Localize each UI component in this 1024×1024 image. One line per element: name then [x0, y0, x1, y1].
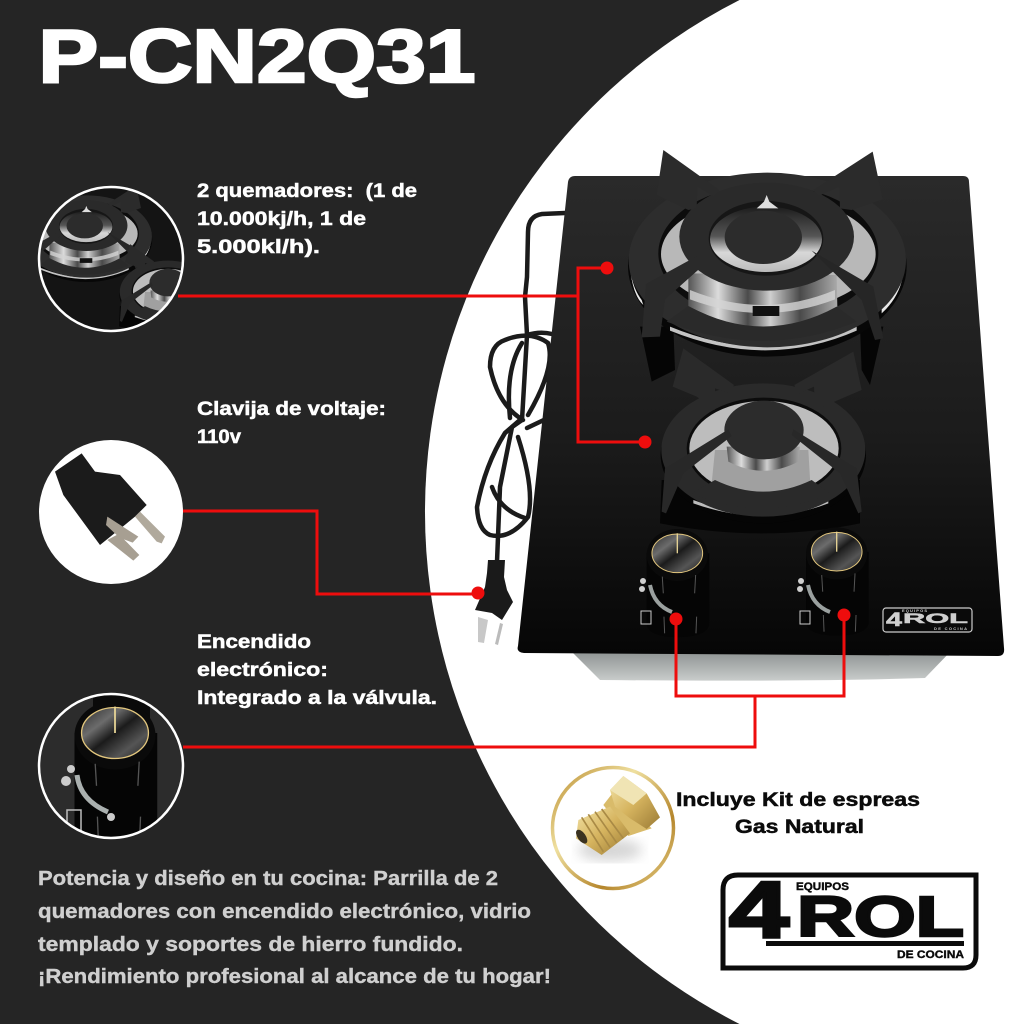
connector: knobs: [183, 608, 850, 747]
small brand badge: [883, 608, 972, 632]
left knob: [647, 529, 709, 637]
small brand badge: ROL: [903, 610, 969, 626]
feature text: ignition: Integrado a la válvula.: [197, 688, 437, 709]
connector: burners: [178, 262, 652, 448]
connector: plug: [183, 511, 484, 600]
description paragraph: ¡Rendimiento profesional al alcance de tu hogar!: [38, 966, 551, 988]
description paragraph: Potencia y diseño en tu cocina: Parrilla de 2: [38, 868, 498, 890]
brand logo: EQUIPOS: [796, 881, 849, 893]
small brand badge: EQUIPOS: [902, 608, 927, 613]
feature photo: plug: [39, 440, 183, 584]
knob symbols: [639, 578, 810, 624]
kit caption: Incluye Kit de espreas: [676, 790, 920, 811]
description paragraph: quemadores con encendido electrónico, vidrio: [38, 901, 531, 923]
description paragraph: templado y soportes de hierro fundido.: [38, 934, 463, 956]
feature photo: burners: [38, 186, 184, 332]
cord plug: [475, 560, 513, 645]
feature text: burners: [197, 181, 417, 258]
power cord: [477, 213, 565, 562]
feature text: ignition: [197, 632, 437, 709]
title: P-CN2Q31: [38, 14, 475, 98]
feature text: plug: [197, 399, 386, 448]
brand logo: [723, 865, 976, 968]
feature text: burners: 5.000kl/h).: [197, 237, 320, 258]
brand logo: 4: [729, 865, 790, 954]
large burner: [628, 150, 907, 385]
feature text: ignition: Encendido: [197, 632, 311, 653]
white circular background: [425, 0, 1024, 1024]
small burner: [660, 348, 866, 533]
right knob: [806, 527, 869, 636]
cooktop hob: [518, 150, 1004, 681]
icon: brass nozzle in gold ring: [552, 768, 674, 888]
small brand badge: 4: [886, 610, 903, 631]
description paragraph: [38, 868, 551, 988]
steel pan under glass: [570, 650, 952, 681]
feature photo: knob: [39, 690, 183, 844]
feature text: plug: 110v: [197, 427, 241, 448]
kit caption: [676, 790, 920, 838]
brand logo: ROL: [797, 885, 964, 949]
small brand badge: DE COCINA: [934, 626, 967, 631]
feature text: burners: 2 quemadores: (1 de: [197, 181, 417, 202]
brand logo: DE COCINA: [897, 949, 964, 961]
feature text: ignition: electrónico:: [197, 660, 328, 681]
kit caption: Gas Natural: [735, 817, 864, 838]
knob dial arcs: [650, 585, 830, 612]
glass plate: [518, 176, 1004, 656]
feature text: burners: 10.000kj/h, 1 de: [197, 209, 366, 230]
feature text: plug: Clavija de voltaje:: [197, 399, 386, 420]
